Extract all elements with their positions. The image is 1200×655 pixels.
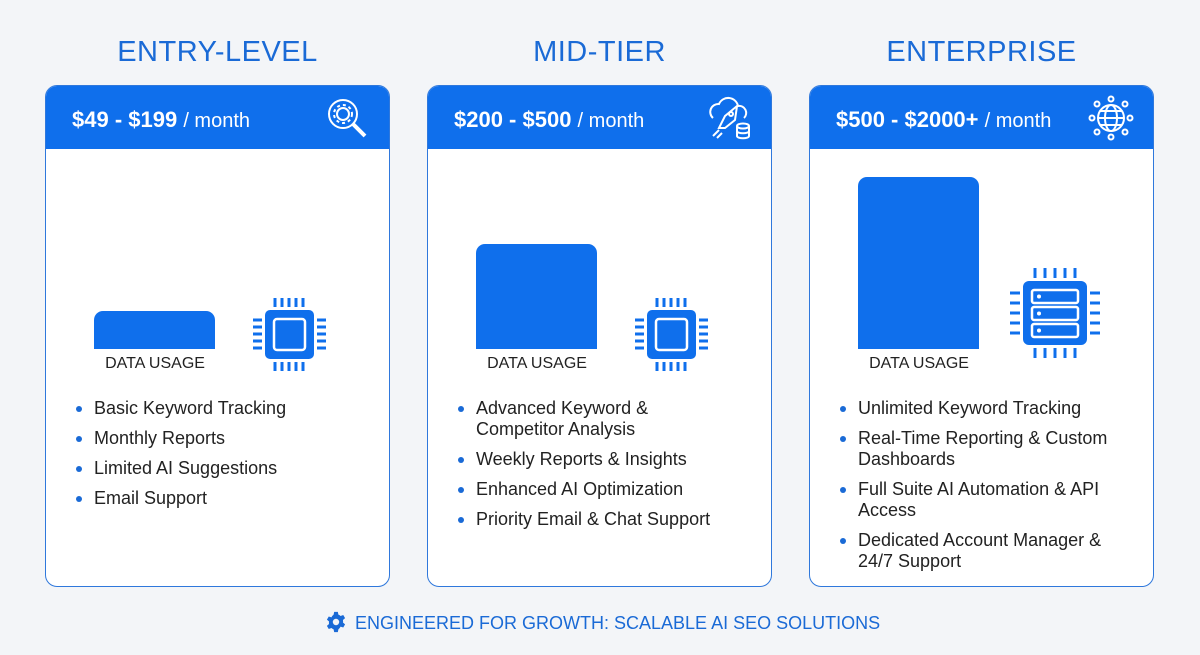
header: price: $49 - $199 / month xyxy=(72,107,250,132)
panel: entry-level xyxy=(45,85,390,587)
icon: chip xyxy=(635,298,708,371)
title: entry-level: ENTRY-LEVEL xyxy=(117,36,318,68)
label: data usage: DATA USAGE xyxy=(105,355,205,372)
title: enterprise: ENTERPRISE xyxy=(886,36,1077,68)
list: features: Priority Email & Chat Support xyxy=(476,509,710,529)
bar: data usage xyxy=(858,177,979,349)
list: features: Advanced Keyword & Competitor Analysis xyxy=(476,398,648,439)
list: features: Basic Keyword Tracking xyxy=(94,398,286,418)
header: price xyxy=(810,86,1153,149)
list: features xyxy=(840,398,1107,571)
list: features: Dedicated Account Manager & 24/7 Support xyxy=(858,530,1101,571)
list: features: Weekly Reports & Insights xyxy=(476,449,687,469)
list: features: Full Suite AI Automation & API Access xyxy=(858,479,1099,520)
footer: tagline: ENGINEERED FOR GROWTH: SCALABLE AI SEO SOLUTIONS xyxy=(355,613,880,633)
list: features: Email Support xyxy=(94,488,207,508)
bar: data usage xyxy=(476,244,597,349)
label: data usage: DATA USAGE xyxy=(869,355,969,372)
header: price: $200 - $500 / month xyxy=(454,107,644,132)
header: price xyxy=(46,86,389,149)
icon: globe network xyxy=(1088,96,1134,140)
list: features: Enhanced AI Optimization xyxy=(476,479,683,499)
icon: server chip xyxy=(1010,268,1100,358)
list: features xyxy=(458,398,710,529)
list: features xyxy=(76,398,286,508)
title: mid-tier: MID-TIER xyxy=(533,36,666,68)
panel: enterprise xyxy=(809,85,1154,587)
icon: magnifier gear xyxy=(328,99,366,138)
list: features: Unlimited Keyword Tracking xyxy=(858,398,1081,418)
header: price xyxy=(428,86,771,149)
header: price: $500 - $2000+ / month xyxy=(836,107,1051,132)
panel: mid-tier xyxy=(427,85,772,587)
list: features: Limited AI Suggestions xyxy=(94,458,277,478)
list: features: Monthly Reports xyxy=(94,428,225,448)
bar: data usage xyxy=(94,311,215,349)
icon: rocket cloud xyxy=(709,96,750,140)
label: data usage: DATA USAGE xyxy=(487,355,587,372)
list: features: Real-Time Reporting & Custom Dashboards xyxy=(858,428,1107,469)
icon: chip xyxy=(253,298,326,371)
